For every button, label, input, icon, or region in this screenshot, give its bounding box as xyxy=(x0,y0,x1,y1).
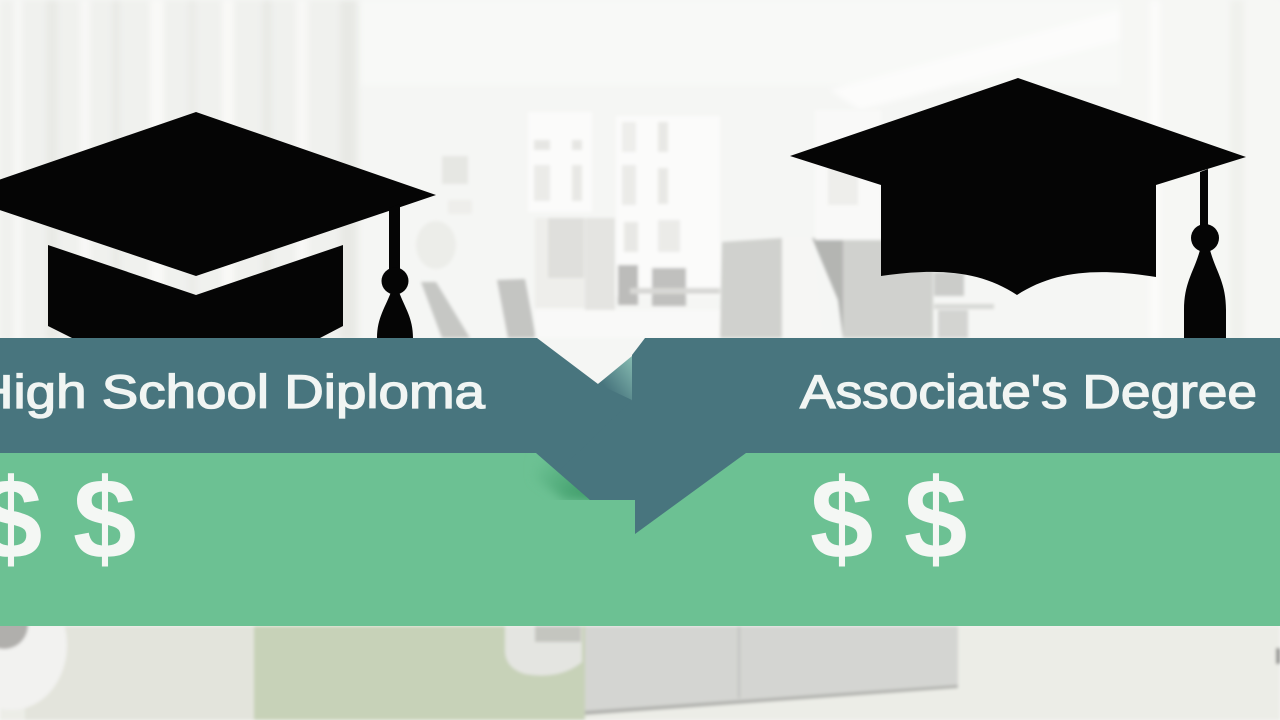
icon: left cap tassel xyxy=(377,204,413,338)
label: Associate's Degree: Associate's Degree xyxy=(800,365,1257,418)
icon: right graduation cap xyxy=(790,78,1246,339)
icon: right cap tassel xyxy=(1184,169,1226,339)
icon: left graduation cap xyxy=(0,112,436,338)
dollar signs: Associate's Degree: $ xyxy=(904,456,967,583)
teal ribbon: High School Diploma xyxy=(0,338,632,500)
ribbon fold highlight xyxy=(598,356,632,400)
green salary band xyxy=(0,453,1280,626)
dollar signs: High School Diploma: $ xyxy=(73,456,136,583)
teal ribbon: Associate's Degree xyxy=(560,338,1280,534)
shadow under left ribbon fold xyxy=(535,458,600,500)
dollar signs: Associate's Degree: $ xyxy=(810,456,873,583)
